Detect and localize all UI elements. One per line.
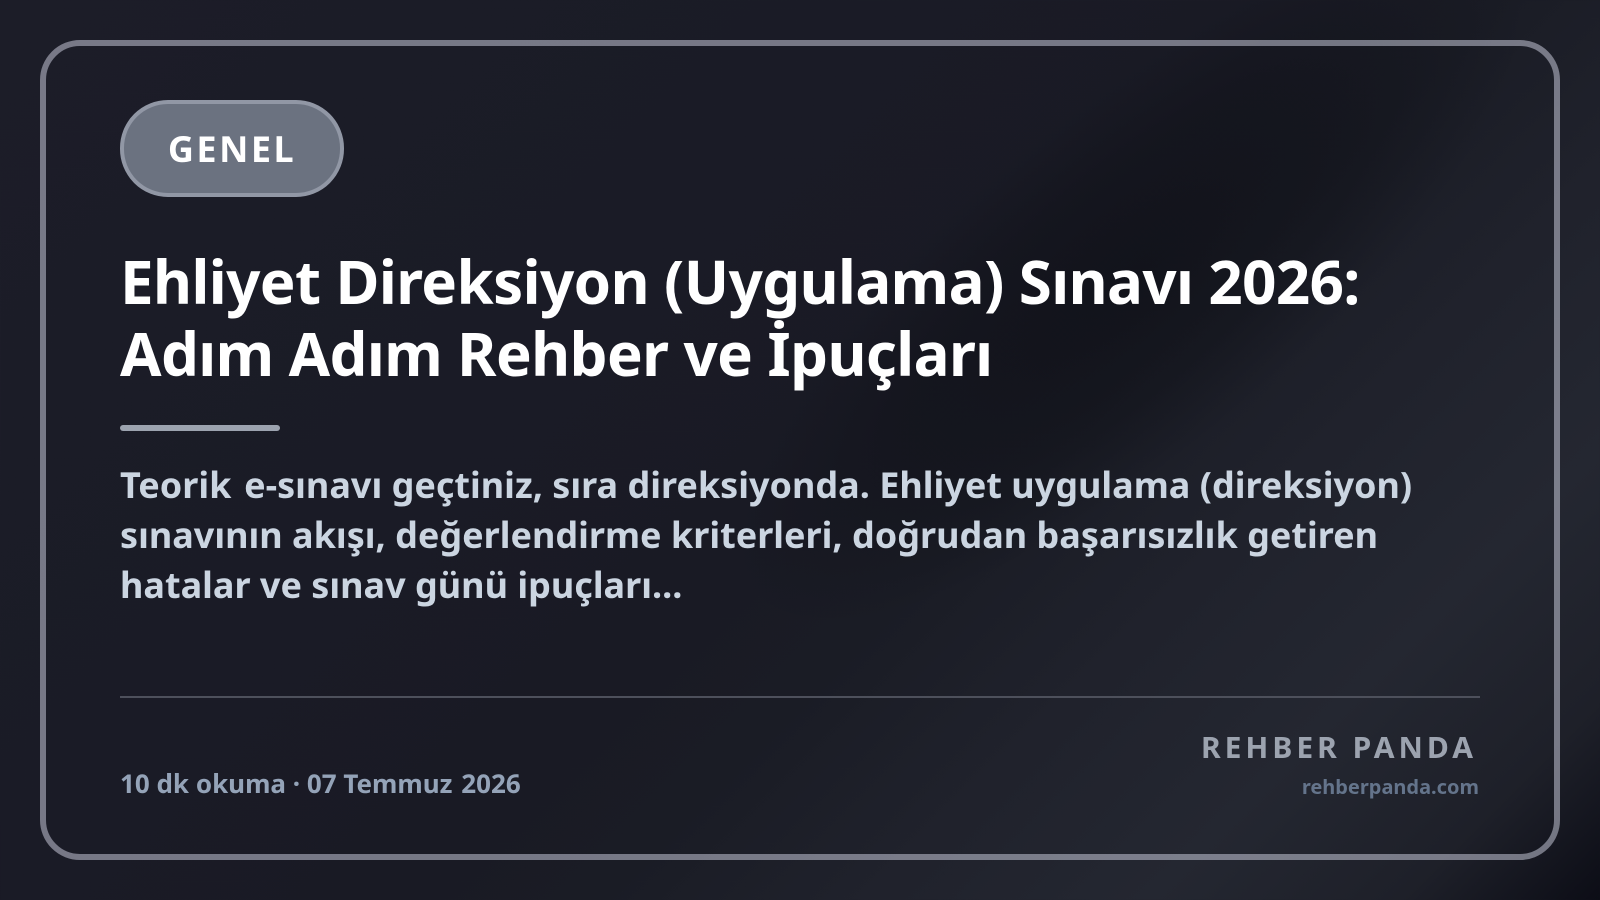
accent bar xyxy=(120,425,280,431)
summary text: hatalar ve sınav günü ipuçları... xyxy=(120,560,682,609)
footer divider xyxy=(120,696,1480,698)
summary text: sınavının akışı, değerlendirme kriterleri, doğrudan başarısızlık getiren xyxy=(120,510,1378,559)
brand name: REHBER PANDA xyxy=(1201,726,1477,767)
category badge xyxy=(120,100,344,197)
website: rehberpanda.com xyxy=(1302,773,1479,800)
category badge: GENEL xyxy=(168,124,296,173)
title xyxy=(120,240,1360,394)
summary text: Teorik e-sınavı geçtiniz, sıra direksiyonda. Ehliyet uygulama (direksiyon) xyxy=(120,460,1412,509)
title: Adım Adım Rehber ve İpuçları xyxy=(120,312,993,394)
summary text xyxy=(120,460,1412,609)
reading time and date: 10 dk okuma · 07 Temmuz 2026 xyxy=(120,765,521,801)
title: Ehliyet Direksiyon (Uygulama) Sınavı 2026: xyxy=(120,240,1360,322)
